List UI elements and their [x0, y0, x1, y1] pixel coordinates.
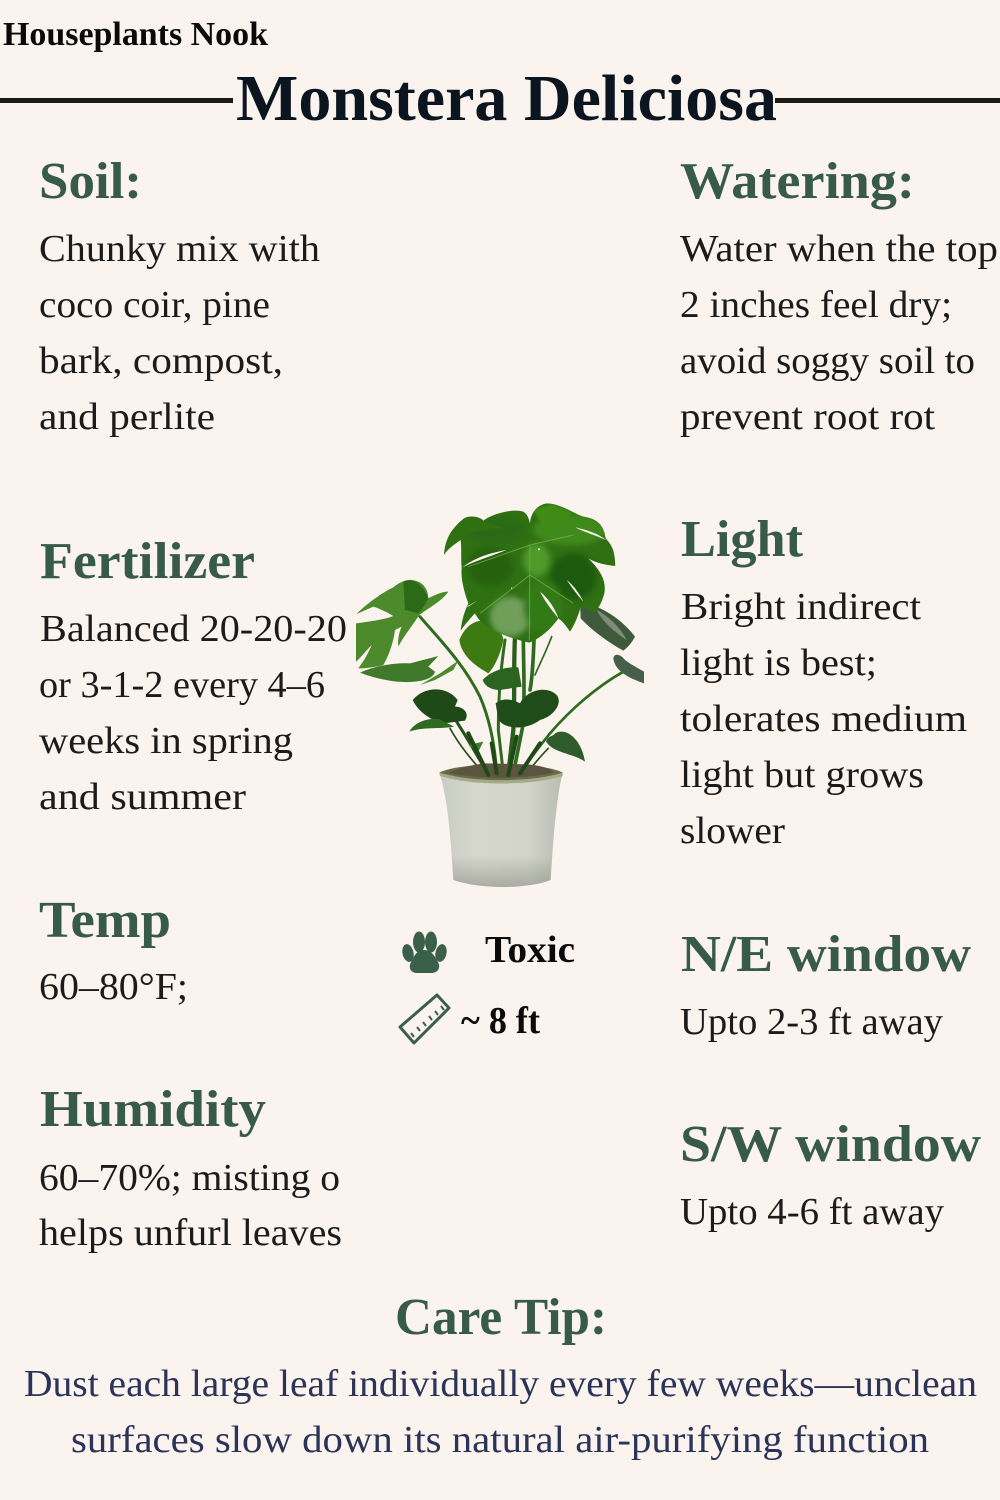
panel: light: slower	[680, 810, 785, 852]
panel: N/E window: N/E window	[681, 926, 971, 983]
brand name: Houseplants Nook	[3, 16, 268, 53]
panel: humidity: 60–70%; misting o	[39, 1157, 340, 1199]
panel: humidity: helps unfurl leaves	[39, 1212, 342, 1254]
dark heart leaves	[413, 689, 467, 723]
panel: fertilizer: Fertilizer	[40, 533, 255, 590]
panel: fertilizer: or 3-1-2 every 4–6	[39, 664, 325, 706]
panel: light: light is best;	[680, 642, 877, 684]
panel: light: tolerates medium	[680, 698, 967, 740]
stems	[420, 617, 623, 775]
panel: watering: Water when the top	[680, 228, 998, 270]
panel: care tip: Dust each large leaf individually every few weeks—unclean	[24, 1363, 977, 1405]
panel: soil	[39, 153, 320, 438]
panel: watering: 2 inches feel dry;	[680, 284, 952, 326]
panel: fertilizer: and summer	[39, 776, 246, 818]
panel: soil: bark, compost,	[39, 340, 283, 382]
grey drooping leaves	[580, 602, 635, 651]
pot	[439, 764, 563, 782]
panel: watering: prevent root rot	[680, 396, 935, 438]
title rule	[0, 98, 1000, 103]
icon: ruler	[400, 995, 449, 1043]
panel: light: light but grows	[680, 754, 924, 796]
panel: humidity	[39, 1081, 342, 1254]
left lower leaf	[360, 656, 438, 682]
panel: temp: 60–80°F;	[39, 966, 188, 1008]
panel: temp	[39, 892, 188, 1008]
illustration: monstera plant in pot	[356, 500, 644, 887]
toxic label: Toxic	[485, 929, 575, 971]
panel: soil: coco coir, pine	[39, 284, 270, 326]
large monstera leaf	[440, 500, 620, 647]
height label: ~ 8 ft	[461, 1000, 540, 1042]
panel: watering: Watering:	[680, 153, 915, 210]
panel: soil: Soil:	[39, 153, 142, 210]
panel: fertilizer: weeks in spring	[39, 720, 293, 762]
title: Monstera Deliciosa	[236, 62, 777, 135]
panel: N/E window	[680, 926, 971, 1043]
panel: care tip: Care Tip:	[395, 1289, 607, 1346]
leaf slits	[463, 527, 606, 618]
panel: care tip: surfaces slow down its natural air-purifying function	[71, 1419, 929, 1461]
back leaf under main	[459, 621, 503, 673]
leaf veins	[468, 535, 573, 640]
panel: N/E window: Upto 2-3 ft away	[680, 1001, 943, 1043]
panel: S/W window	[680, 1116, 981, 1233]
panel: S/W window: S/W window	[680, 1116, 981, 1173]
panel: S/W window: Upto 4-6 ft away	[680, 1191, 944, 1233]
panel: soil: and perlite	[39, 396, 215, 438]
panel: light: Bright indirect	[681, 586, 921, 628]
panel: light: Light	[681, 511, 804, 568]
panel: soil: Chunky mix with	[39, 228, 320, 270]
panel: temp: Temp	[39, 892, 171, 949]
mid stem small leaf	[483, 667, 522, 690]
panel: care tip	[24, 1289, 977, 1461]
panel: watering: avoid soggy soil to	[680, 340, 975, 382]
panel: watering	[680, 153, 998, 438]
panel: light	[680, 511, 967, 852]
soil and stem bases	[448, 763, 553, 778]
panel: fertilizer	[39, 533, 347, 818]
icon: paw print	[401, 932, 448, 973]
left monstera leaf	[356, 580, 448, 668]
panel: humidity: Humidity	[40, 1081, 266, 1138]
panel: fertilizer: Balanced 20-20-20	[40, 608, 347, 650]
